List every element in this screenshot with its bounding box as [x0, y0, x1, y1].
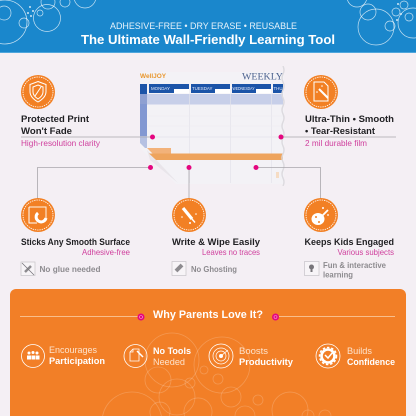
connector lines [21, 134, 396, 200]
brand logo: WellJOY [140, 74, 166, 80]
benefit: no tools needed: Needed [153, 356, 185, 367]
feature: sticks any surface [21, 198, 130, 276]
weekday headers [149, 84, 283, 94]
feature: keeps kids engaged: learning [323, 270, 353, 280]
benefit: confidence: Confidence [347, 356, 395, 367]
weekday headers: MONDAY [151, 86, 170, 91]
benefit: no tools needed: No Tools [153, 345, 191, 356]
icon: light bulb [304, 262, 319, 276]
benefit: participation: Encourages [49, 344, 97, 355]
benefit: participation: Participation [49, 355, 105, 366]
background bubbles [103, 333, 331, 416]
weekly heading: WEEKLY [242, 72, 284, 82]
benefit: productivity [209, 344, 294, 368]
icon: magnet [21, 198, 55, 232]
icon: shield [21, 75, 55, 109]
feature: ultra-thin: Ultra-Thin • Smooth [305, 113, 394, 124]
feature: write and wipe: Leaves no traces [202, 247, 260, 257]
feature: ultra-thin: • Tear-Resistant [305, 125, 375, 136]
calendar product image [140, 66, 284, 186]
weekday headers: THU [274, 86, 283, 91]
wavy torn edge [282, 66, 284, 186]
icon: film sheet [304, 75, 338, 109]
benefit: participation [22, 344, 105, 368]
icon: marker [172, 198, 206, 232]
benefit: confidence: Builds [347, 345, 372, 356]
title: The Ultimate Wall-Friendly Learning Tool [81, 32, 335, 47]
divider right with dot [272, 314, 395, 320]
divider left with dot [20, 314, 144, 320]
feature: write and wipe: No Ghosting [191, 264, 237, 274]
orange footer bar [147, 148, 283, 178]
benefit: confidence [316, 344, 395, 368]
icon: eraser [172, 262, 186, 276]
icon: target [209, 344, 233, 368]
feature: keeps kids engaged: Fun & interactive [323, 260, 386, 270]
feature: sticks any surface: Adhesive-free [82, 247, 130, 257]
weekday headers: WEDNESDAY [232, 86, 255, 91]
feature: keeps kids engaged: Keeps Kids Engaged [304, 236, 394, 247]
panel heading: Why Parents Love It? [153, 309, 263, 321]
feature: ultra-thin [304, 75, 394, 148]
feature: ultra-thin: 2 mil durable film [305, 138, 367, 148]
feature: protected print: Protected Print [21, 113, 89, 124]
feature: keeps kids engaged: Various subjects [338, 247, 394, 257]
icon: sheet and tool [124, 344, 147, 368]
benefit: no tools needed [124, 344, 191, 368]
feature: sticks any surface: No glue needed [40, 264, 100, 274]
weekday headers: TUESDAY [192, 86, 212, 91]
feature: protected print [21, 75, 101, 148]
feature: keeps kids engaged [304, 198, 394, 280]
icon: no glue [21, 262, 35, 276]
header subtitle: ADHESIVE-FREE • DRY ERASE • REUSABLE [110, 20, 297, 31]
feature: sticks any surface: Sticks Any Smooth Surface [21, 236, 130, 247]
calendar body and grid [140, 84, 283, 183]
feature: protected print: Won't Fade [21, 125, 72, 136]
benefit: productivity: Boosts [239, 345, 268, 356]
feature: protected print: High-resolution clarity [21, 138, 101, 148]
icon: paint palette [304, 198, 338, 232]
icon: group of people [22, 344, 44, 368]
feature: write and wipe [172, 198, 261, 276]
benefit: productivity: Productivity [239, 356, 294, 367]
feature: write and wipe: Write & Wipe Easily [172, 236, 261, 247]
panel: why parents love it [10, 289, 406, 416]
header banner [0, 0, 416, 53]
icon: gear with check [316, 344, 340, 368]
